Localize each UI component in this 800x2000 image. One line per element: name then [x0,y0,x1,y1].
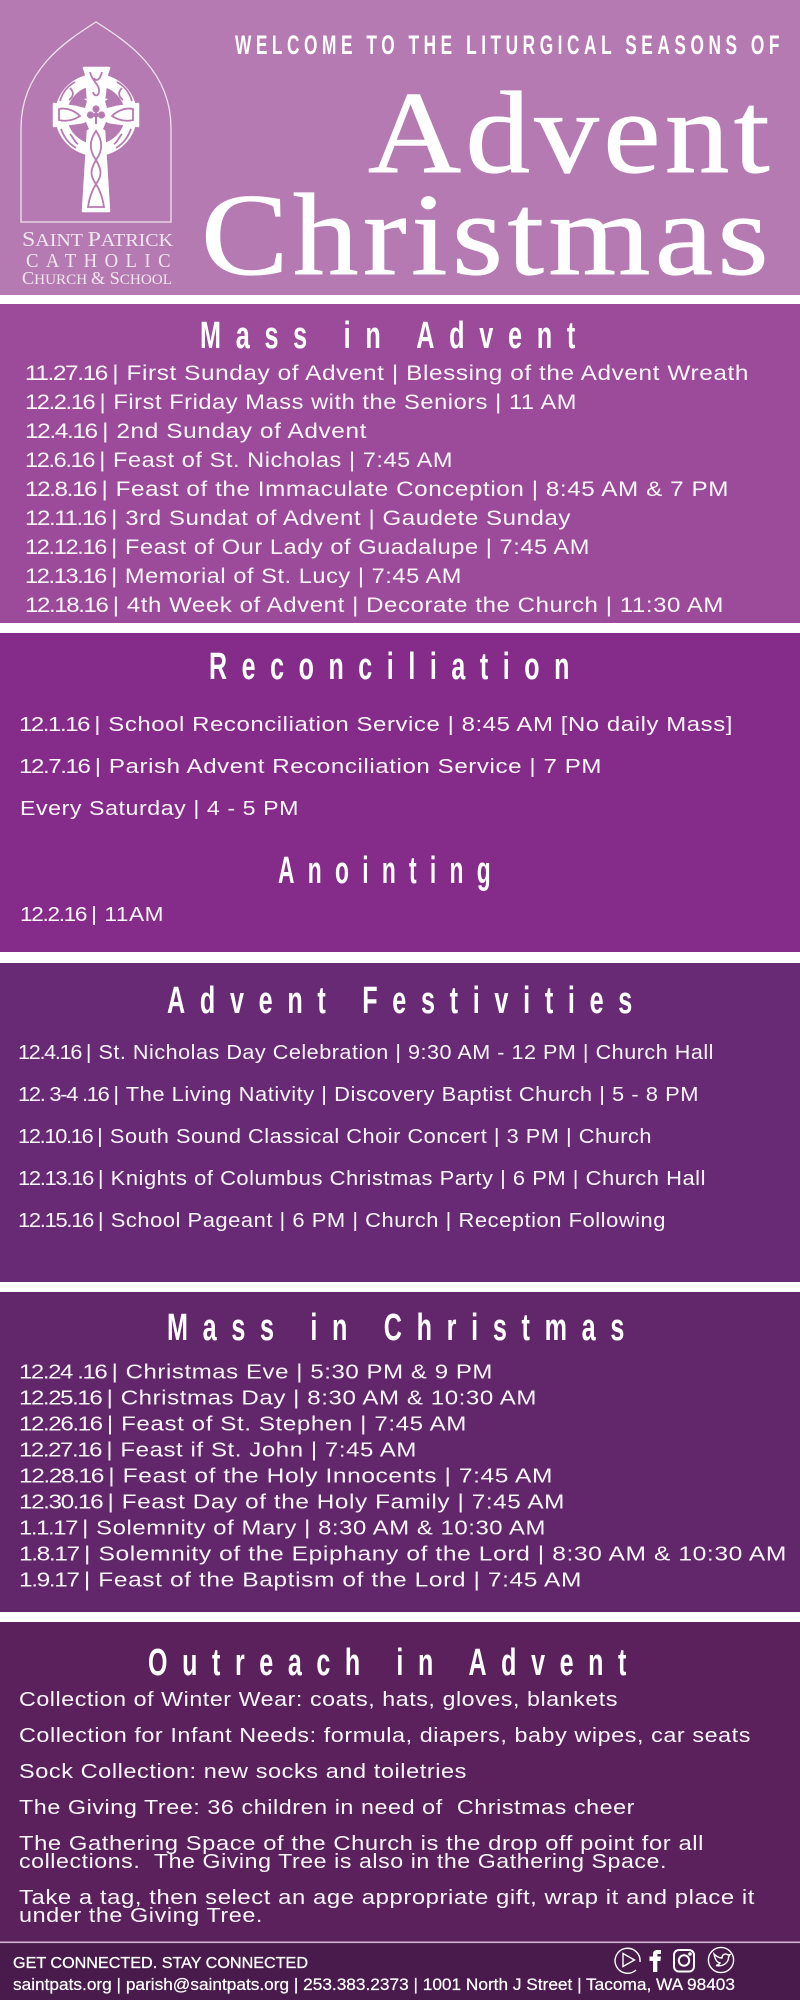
schedule list: Christmas masses: 12.27.16 | Feast if St. John | 7:45 AM [19,1439,417,1462]
schedule list: festivities: 12.4.16 | St. Nicholas Day Celebration | 9:30 AM - 12 PM | Church Hall [18,1041,714,1064]
text block: outreach collections: Take a tag, then select an age appropriate gift, wrap it and place it [19,1886,755,1909]
footer contact line: saintpats.org | parish@saintpats.org | 253.383.2373 | 1001 North J Street | Tacoma, WA 98403 [13,1976,735,1994]
title: Advent: Advent [368,69,774,198]
schedule list: festivities: 12.15.16 | School Pageant | 6 PM | Church | Reception Following [18,1209,666,1232]
logo wordmark [22,227,178,288]
footer tagline: GET CONNECTED. STAY CONNECTED [13,1955,308,1972]
title: Christmas: Christmas [201,171,773,300]
schedule list: Advent masses: 12.6.16 | Feast of St. Nicholas | 7:45 AM [25,449,453,472]
text block: outreach collections: The Giving Tree: 36 children in need of Christmas cheer [19,1796,635,1819]
schedule list: Advent masses [25,362,749,617]
panel: Outreach in Advent [0,1622,800,1942]
heading: Reconciliation: Reconciliation [209,645,584,687]
schedule list: Christmas masses: 1.1.17 | Solemnity of Mary | 8:30 AM & 10:30 AM [19,1517,546,1540]
icon: celtic cross [54,68,138,211]
schedule list: Advent masses: 12.8.16 | Feast of the Immaculate Conception | 8:45 AM & 7 PM [25,478,729,501]
text block: outreach collections: Collection of Winter Wear: coats, hats, gloves, blankets [19,1688,618,1711]
text block: outreach collections [19,1688,755,1927]
panel: Mass in Advent [0,304,800,623]
schedule list: Advent masses: 11.27.16 | First Sunday of Advent | Blessing of the Advent Wreath [25,362,749,385]
schedule line: Anointing: 12.2.16 | 11AM [20,903,164,926]
text block: outreach collections: under the Giving Tree. [19,1904,263,1927]
schedule list: Christmas masses: 12.25.16 | Christmas Day | 8:30 AM & 10:30 AM [19,1387,537,1410]
icon: gothic arch outline [21,22,171,222]
schedule list: festivities: 12.10.16 | South Sound Classical Choir Concert | 3 PM | Church [18,1125,652,1148]
text block: outreach collections: collections. The Giving Tree is also in the Gathering Space. [19,1850,667,1873]
text block: outreach collections: Sock Collection: new socks and toiletries [19,1760,467,1783]
schedule list: Christmas masses: 12.24 .16 | Christmas Eve | 5:30 PM & 9 PM [19,1361,493,1384]
schedule list: festivities: 12. 3-4 .16 | The Living Nativity | Discovery Baptist Church | 5 - 8 PM [18,1083,699,1106]
logo wordmark: CATHOLIC [26,250,178,272]
schedule list: Christmas masses [19,1361,787,1592]
schedule list: Advent masses: 12.18.16 | 4th Week of Advent | Decorate the Church | 11:30 AM [25,594,724,617]
logo: Saint Patrick Catholic Church and School [21,22,178,288]
panel: Mass in Christmas [0,1292,800,1612]
schedule list: Christmas masses: 12.26.16 | Feast of St. Stephen | 7:45 AM [19,1413,467,1436]
text block: outreach collections: Collection for Infant Needs: formula, diapers, baby wipes, car seats [19,1724,751,1747]
schedule list: Reconciliation: 12.7.16 | Parish Advent Reconciliation Service | 7 PM [19,755,602,778]
icon: instagram [674,1950,694,1972]
logo wordmark: CHURCH & SCHOOL [22,268,172,288]
schedule list: Reconciliation [19,713,733,820]
logo wordmark: SAINT PATRICK [22,227,173,251]
text block: outreach collections: The Gathering Space of the Church is the drop off point for all [19,1832,704,1855]
panel: Advent Festivities [0,963,800,1282]
panel: Reconciliation and Anointing [0,633,800,952]
schedule list: Reconciliation: Every Saturday | 4 - 5 PM [20,797,299,820]
schedule list: Advent masses: 12.4.16 | 2nd Sunday of Advent [25,420,367,443]
schedule list: Advent masses: 12.2.16 | First Friday Mass with the Seniors | 11 AM [25,391,577,414]
icon: video play [615,1948,640,1973]
schedule list: festivities: 12.13.16 | Knights of Columbus Christmas Party | 6 PM | Church Hall [18,1167,706,1190]
schedule list: Christmas masses: 12.28.16 | Feast of the Holy Innocents | 7:45 AM [19,1465,553,1488]
panel: footer [0,1942,800,2000]
heading: Mass in Advent: Mass in Advent [200,314,590,356]
panel: header [0,0,800,300]
schedule list: Christmas masses: 1.9.17 | Feast of the Baptism of the Lord | 7:45 AM [19,1569,582,1592]
schedule list: Advent masses: 12.11.16 | 3rd Sundat of Advent | Gaudete Sunday [25,507,571,530]
schedule list: Reconciliation: 12.1.16 | School Reconciliation Service | 8:45 AM [No daily Mass] [19,713,733,736]
schedule list: Christmas masses: 12.30.16 | Feast Day of the Holy Family | 7:45 AM [19,1491,565,1514]
schedule list: festivities [18,1041,714,1232]
schedule list: Advent masses: 12.12.16 | Feast of Our Lady of Guadalupe | 7:45 AM [25,536,590,559]
icon: twitter [708,1947,734,1973]
heading: Anointing: Anointing [278,849,504,891]
schedule list: Advent masses: 12.13.16 | Memorial of St. Lucy | 7:45 AM [25,565,462,588]
icon: facebook [650,1950,661,1972]
schedule list: Christmas masses: 1.8.17 | Solemnity of the Epiphany of the Lord | 8:30 AM & 10:30 AM [19,1543,787,1566]
